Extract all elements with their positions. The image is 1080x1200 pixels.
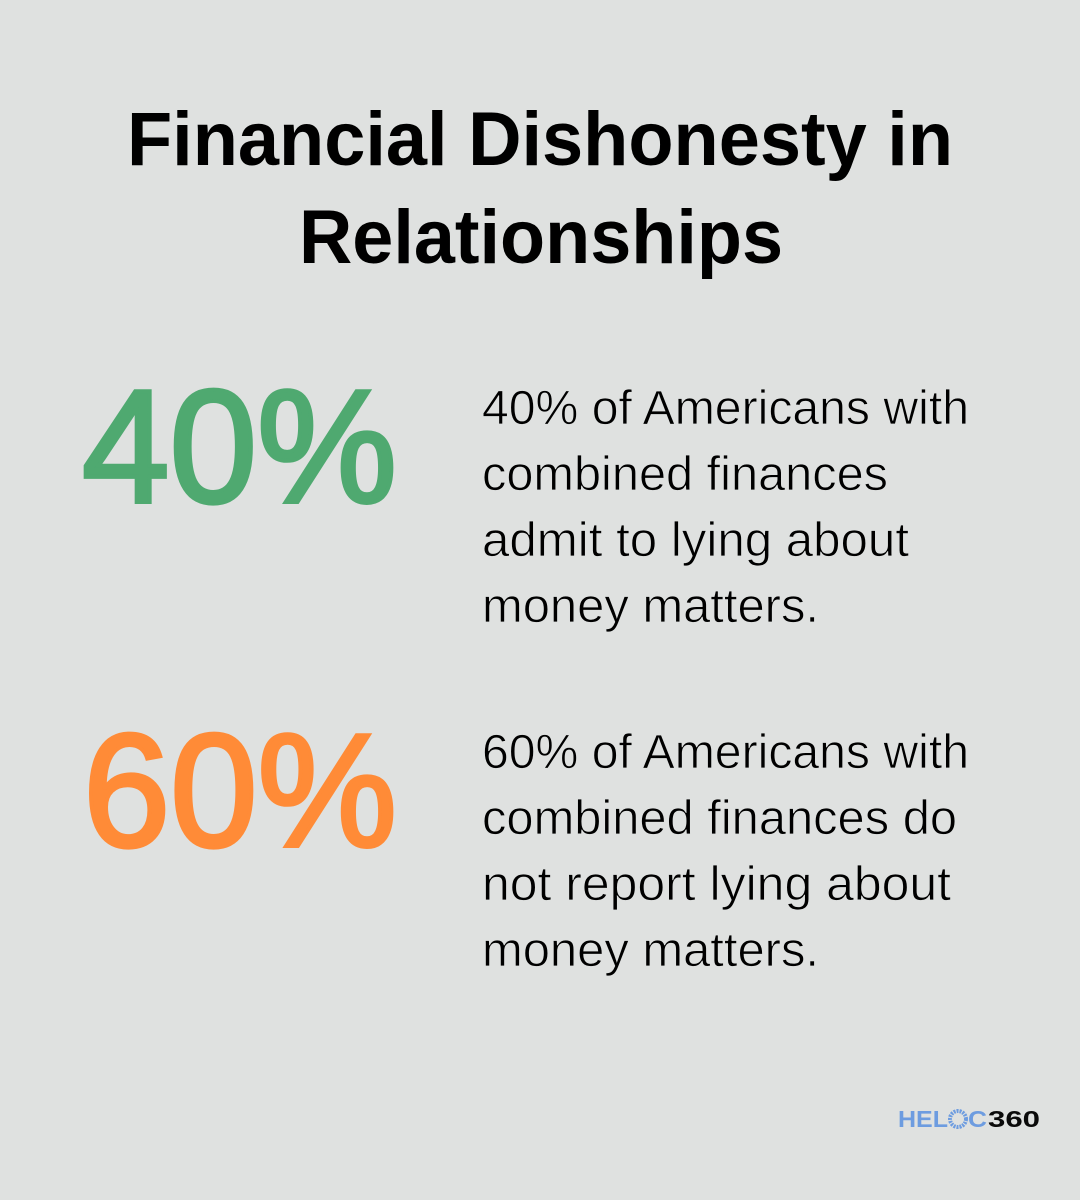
text block: 60% description: 60% of Americans with bbox=[482, 726, 969, 779]
logo: HELOC360: C bbox=[968, 1106, 987, 1132]
title: Financial Dishonesty in bbox=[127, 97, 953, 182]
text block: 60% description bbox=[482, 726, 969, 977]
text block: 40% description bbox=[482, 382, 969, 633]
icon: logo swirl bbox=[950, 1111, 966, 1127]
text block: 40% description: admit to lying about bbox=[482, 514, 909, 567]
stat: 40%: 40% bbox=[82, 357, 397, 537]
text block: 60% description: combined finances do bbox=[482, 792, 957, 845]
logo: HELOC360 bbox=[898, 1106, 1040, 1132]
logo: HELOC360: 360 bbox=[988, 1106, 1040, 1132]
text block: 60% description: money matters. bbox=[482, 924, 819, 977]
text block: 40% description: money matters. bbox=[482, 580, 819, 633]
title: Relationships bbox=[299, 195, 783, 280]
stat: 60%: 60% bbox=[83, 701, 397, 881]
text block: 40% description: combined finances bbox=[482, 448, 888, 501]
title bbox=[127, 97, 953, 280]
text block: 40% description: 40% of Americans with bbox=[482, 382, 969, 435]
text block: 60% description: not report lying about bbox=[482, 858, 951, 911]
logo: HELOC360: HEL bbox=[898, 1106, 948, 1132]
